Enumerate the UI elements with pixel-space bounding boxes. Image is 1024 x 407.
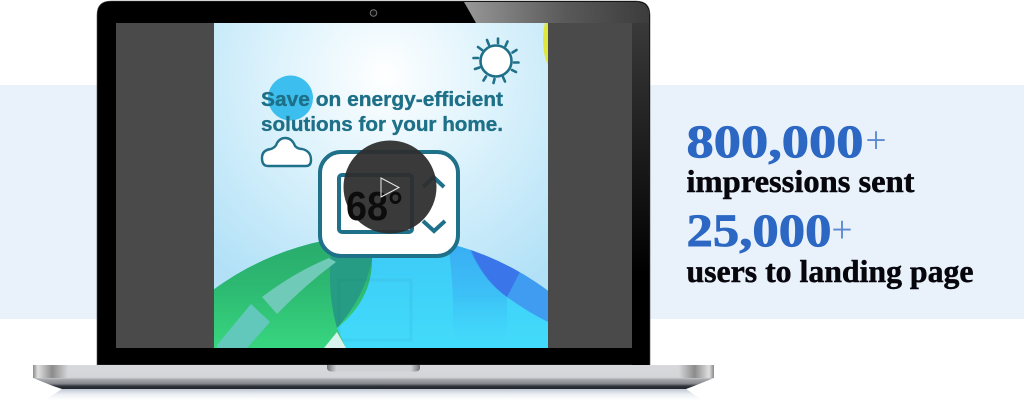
right edge highlight bbox=[679, 365, 714, 378]
temperature through disc: 68° bbox=[346, 183, 403, 229]
stat: users: users to landing page bbox=[686, 253, 974, 289]
screen letterbox bbox=[116, 23, 632, 348]
stat: impressions: 800,000 bbox=[686, 116, 864, 168]
icon: play triangle bbox=[381, 178, 399, 197]
land stripes bbox=[262, 258, 336, 314]
left edge highlight bbox=[33, 365, 68, 378]
icon: cloud bbox=[262, 138, 311, 166]
thermostat body bbox=[320, 152, 458, 256]
up chevron bbox=[423, 177, 444, 187]
lid glare bbox=[464, 2, 649, 23]
left continent bbox=[214, 230, 372, 348]
webcam bbox=[370, 10, 377, 16]
right continent bbox=[470, 250, 548, 322]
laptop lid bbox=[97, 1, 650, 365]
globe ocean bbox=[214, 230, 548, 348]
laptop base bbox=[33, 365, 714, 400]
statistics bbox=[686, 116, 974, 289]
base reflection bbox=[45, 389, 702, 400]
ghost thermostat bbox=[339, 280, 411, 340]
stat: impressions: impressions sent bbox=[686, 163, 915, 199]
stat: users: 25,000 bbox=[686, 205, 832, 257]
right bezel shading bbox=[632, 2, 649, 365]
play button disc bbox=[344, 140, 436, 234]
base body bbox=[33, 365, 714, 389]
sky background bbox=[214, 23, 548, 290]
thermostat display bbox=[339, 175, 412, 232]
icon: sun bbox=[474, 38, 518, 83]
hinge notch bbox=[327, 365, 420, 372]
laptop bbox=[97, 1, 650, 365]
stat: users bbox=[686, 205, 974, 289]
background band bbox=[0, 85, 1024, 319]
stat: impressions: + bbox=[866, 120, 886, 162]
thermostat bbox=[320, 152, 458, 256]
stat: users: + bbox=[832, 209, 852, 251]
overlap zone bbox=[330, 256, 372, 328]
headline: Save on energy-efficient bbox=[261, 88, 503, 111]
stat: impressions bbox=[686, 116, 915, 199]
headline: solutions for your home. bbox=[261, 113, 503, 136]
dark blue patch bbox=[471, 250, 520, 297]
right blue strip bbox=[450, 246, 507, 314]
globe bbox=[214, 230, 548, 348]
video frame bbox=[214, 23, 548, 348]
down chevron bbox=[423, 221, 445, 231]
yellow corner bbox=[543, 23, 548, 66]
white sliver bbox=[324, 332, 346, 348]
highlight circle bbox=[268, 76, 313, 120]
